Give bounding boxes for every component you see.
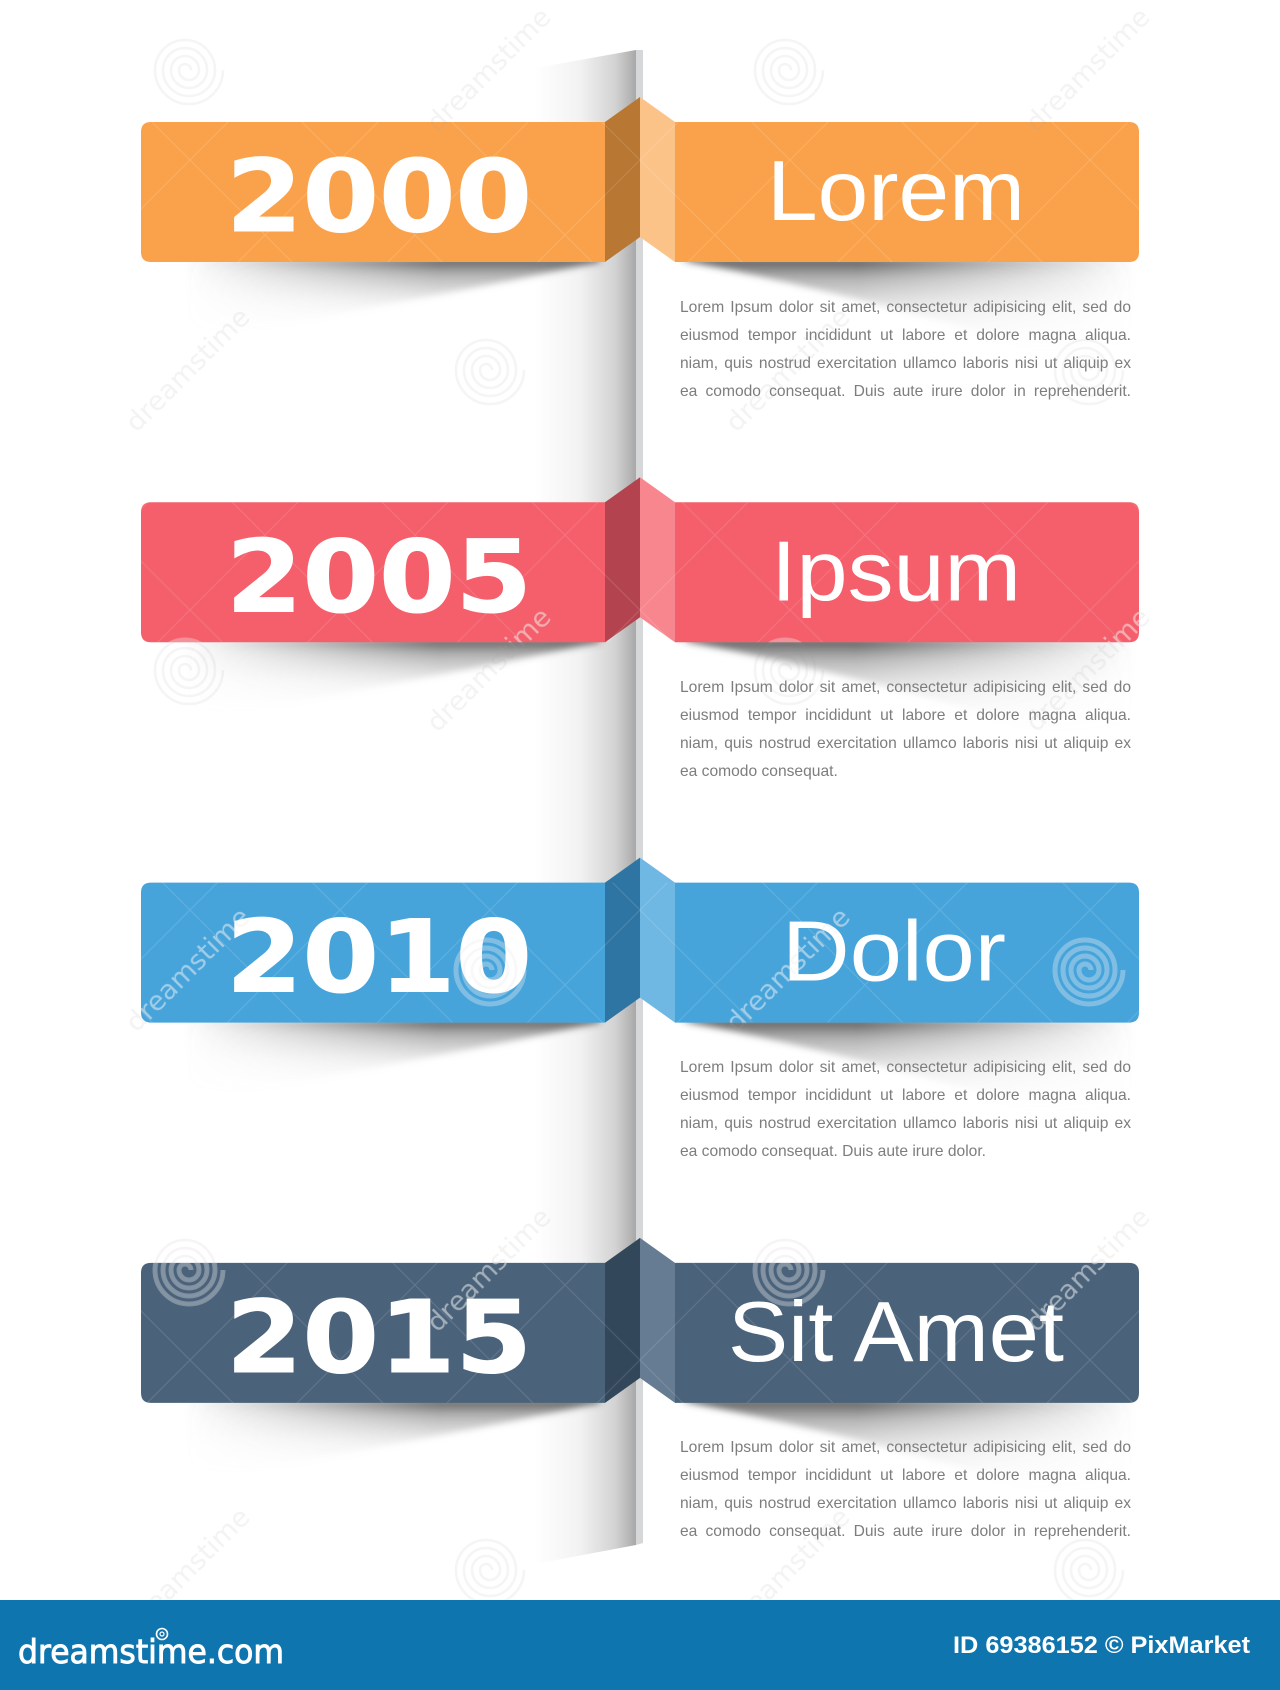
watermark text: dreamstime [1020, 1202, 1156, 1338]
ribbon: 2015: Sit Amet [728, 1285, 1064, 1380]
ribbon: 2010: 2010 [226, 899, 532, 1016]
body text: 2005: eiusmod tempor incididunt ut labore et dolore magna aliqua. [680, 707, 1131, 724]
body text: 2015 [680, 1439, 1131, 1540]
watermark text: dreamstime [120, 902, 256, 1038]
watermark spirals over ribbons [155, 640, 1123, 1304]
body text: 2010: eiusmod tempor incididunt ut labore et dolore magna aliqua. [680, 1087, 1131, 1104]
body text: 2015: eiusmod tempor incididunt ut labore et dolore magna aliqua. [680, 1467, 1131, 1484]
watermark text over ribbons [120, 602, 1156, 1338]
body text: 2000: eiusmod tempor incididunt ut labore et dolore magna aliqua. [680, 326, 1131, 344]
ribbon: 2015: 2015 [226, 1279, 532, 1396]
body text: 2005: niam, quis nostrud exercitation ullamco laboris nisi ut aliquip ex [680, 735, 1131, 752]
ribbon: 2005: Ipsum [771, 524, 1021, 619]
watermark text over ribbons: dreamstime [421, 602, 557, 738]
watermark text over ribbons: dreamstime [421, 1202, 557, 1338]
body text: 2010: niam, quis nostrud exercitation ullamco laboris nisi ut aliquip ex [680, 1115, 1131, 1132]
watermark text: dreamstime [421, 1202, 557, 1338]
body text: 2005: Lorem Ipsum dolor sit amet, consectetur adipisicing elit, sed do [680, 679, 1131, 696]
ribbon: 2000: 2000 [226, 138, 532, 255]
watermark lattice on ribbons [141, 97, 1139, 1407]
central spine with page-fold shadow [535, 50, 643, 1564]
body text: 2015: ea comodo consequat. Duis aute irure dolor in reprehenderit. [680, 1523, 1131, 1540]
watermark text: dreamstime [720, 902, 856, 1038]
watermark text: dreamstime [421, 602, 557, 738]
watermark text: dreamstime [720, 302, 856, 438]
footer image id and credit: ID 69386152 © PixMarket [953, 1632, 1250, 1659]
ribbon: 2010: Dolor [782, 905, 1006, 1000]
footer logo: dreamstime.com: dreamstime.com [18, 1632, 284, 1671]
ribbon: 2005 [141, 477, 1139, 700]
watermark text over ribbons: dreamstime [120, 902, 256, 1038]
body text: 2005 [680, 679, 1131, 780]
watermark text [120, 2, 1156, 1638]
body text: 2000 [680, 298, 1131, 400]
ribbon: 2015 [141, 1238, 1139, 1460]
body text: 2000: ea comodo consequat. Duis aute irure dolor in reprehenderit. [680, 382, 1131, 400]
ribbon: 2000 [141, 97, 1139, 320]
body text: 2010: Lorem Ipsum dolor sit amet, consectetur adipisicing elit, sed do [680, 1059, 1131, 1076]
body text: 2005: ea comodo consequat. [680, 763, 838, 780]
watermark text: dreamstime [1020, 2, 1156, 138]
body text: 2015: Lorem Ipsum dolor sit amet, consectetur adipisicing elit, sed do [680, 1439, 1131, 1456]
ribbon: 2000: Lorem [767, 144, 1025, 239]
body text: 2015: niam, quis nostrud exercitation ullamco laboris nisi ut aliquip ex [680, 1495, 1131, 1512]
footer bar [0, 1600, 1280, 1690]
watermark spirals [155, 40, 1123, 1604]
watermark text over ribbons: dreamstime [1020, 602, 1156, 738]
body text: 2000: niam, quis nostrud exercitation ullamco laboris nisi ut aliquip ex [680, 354, 1131, 372]
body text: 2010: ea comodo consequat. Duis aute irure dolor. [680, 1143, 986, 1160]
watermark text over ribbons: dreamstime [1020, 1202, 1156, 1338]
body text: 2010 [680, 1059, 1131, 1160]
ribbon: 2005: 2005 [226, 518, 532, 635]
ribbon: 2010 [141, 858, 1139, 1080]
watermark text: dreamstime [421, 2, 557, 138]
watermark text: dreamstime [1020, 602, 1156, 738]
body text: 2000: Lorem Ipsum dolor sit amet, consectetur adipisicing elit, sed do [680, 298, 1131, 316]
watermark text: dreamstime [120, 302, 256, 438]
watermark text over ribbons: dreamstime [720, 902, 856, 1038]
